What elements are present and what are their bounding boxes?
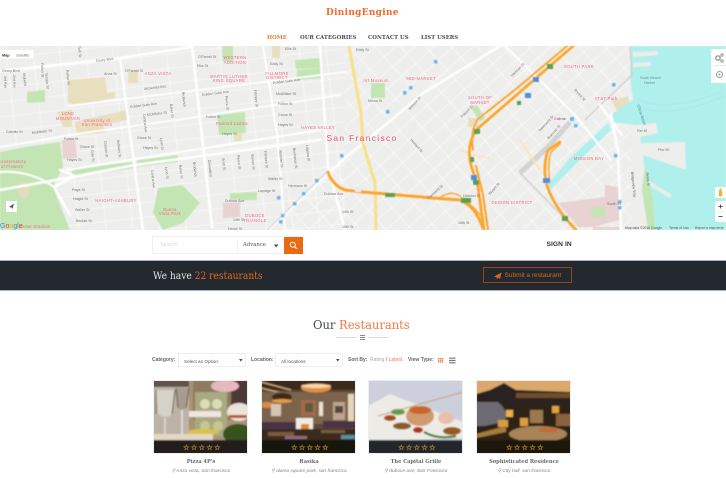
neighbourhood labels: WESTERN <box>223 55 247 60</box>
street labels: Geary Blvd <box>2 69 20 73</box>
photo: wine glasses and salad <box>154 381 247 453</box>
street labels: Eddy St <box>270 62 283 66</box>
neighbourhood labels: MID-MARKET <box>406 76 436 81</box>
street labels: 15th St <box>458 221 469 225</box>
highway shields <box>385 64 568 221</box>
card: Rasika <box>261 380 356 454</box>
filter bar: View Type: <box>408 357 434 363</box>
street labels: O'Farrell St <box>125 69 143 73</box>
street labels: Central Ave <box>150 170 156 189</box>
map type control: Satellite <box>16 53 30 57</box>
dark banner <box>0 260 726 291</box>
street labels: Divisadero <box>207 160 213 177</box>
street labels: Broderick <box>192 162 198 177</box>
street labels: Bryant St <box>573 88 586 102</box>
street labels: Folsom St <box>460 104 474 119</box>
map <box>0 46 726 230</box>
sign in: SIGN IN <box>546 240 572 248</box>
street labels: Anza St <box>104 72 117 76</box>
map type control: Map <box>2 53 10 57</box>
street labels: Division St <box>463 194 480 198</box>
main streets <box>0 46 632 230</box>
zoom control <box>715 201 726 222</box>
street labels: Hayes St <box>278 123 293 127</box>
location select <box>275 353 343 367</box>
neighbourhood labels: Kezar Stadium <box>19 224 51 229</box>
neighbourhood labels: Art Museum <box>363 78 389 83</box>
street labels: McAllister St <box>32 129 52 135</box>
category select <box>178 353 246 367</box>
street labels: Fulton St <box>64 137 78 141</box>
street labels: Duboce Ave <box>225 199 244 203</box>
street labels: Brannan St <box>546 124 561 140</box>
card title: Pizza 4P's: Pizza 4P's <box>187 458 215 464</box>
street labels: Bryant St <box>488 182 501 196</box>
navigation: LIST USERS <box>421 34 458 40</box>
highways <box>328 46 576 230</box>
neighbourhood labels: AT&T Park <box>595 96 618 101</box>
street labels: South Beach <box>640 76 661 80</box>
street labels: 2nd Ave <box>12 75 16 88</box>
neighbourhood labels: San Francisco <box>82 122 113 127</box>
street labels: China Basin <box>636 104 647 126</box>
card title: Sophisticated Residence: Sophisticated Residence <box>489 458 559 464</box>
filter bar: Location: <box>251 357 274 363</box>
street labels: Webster St <box>278 150 284 168</box>
street labels: Steiner St <box>250 154 256 170</box>
card location: alamo square park: ⚲ alamo square park, san francisco <box>271 469 347 474</box>
street labels <box>2 18 669 231</box>
street labels: Ashbury St <box>116 140 122 158</box>
street labels: Townsend St <box>426 184 444 201</box>
neighbourhood labels: FILLMORE <box>265 71 289 76</box>
neighbourhood labels: MARTIN LUTHER <box>210 74 248 79</box>
neighbourhood labels: HAYES VALLEY <box>301 125 335 130</box>
street labels: Fillmore St <box>263 151 269 168</box>
street labels: Baker St <box>169 104 174 118</box>
pegman <box>715 187 726 198</box>
star rating: ☆☆☆☆☆ <box>291 442 330 452</box>
neighbourhood labels: MOUNTAIN <box>56 116 80 121</box>
google logo: Google <box>0 223 23 230</box>
card: Pizza 4P's <box>153 380 248 454</box>
search bar: Search <box>160 242 177 248</box>
street labels: Haight St <box>73 197 88 201</box>
street labels: Ellis St <box>197 64 208 68</box>
search bar: Advance <box>243 242 266 248</box>
street labels: Bridgeview Way <box>630 172 637 198</box>
neighbourhood labels: DESIGN DISTRICT <box>491 200 533 205</box>
map: Report a map error <box>695 226 725 230</box>
title: DiningEngine <box>326 7 399 18</box>
street labels: Page St <box>72 188 85 192</box>
banner text: We have 22 restaurants <box>152 270 262 282</box>
street labels: Lyon St <box>164 167 169 179</box>
street labels: Howard St <box>409 138 423 153</box>
street labels: Waller St <box>268 177 282 181</box>
photo: restaurant interior <box>262 381 355 453</box>
street labels: Pier 48 <box>637 129 647 133</box>
street labels: Fillmore St <box>253 90 259 107</box>
submit button: Submit a restaurant <box>504 272 561 278</box>
location select: All locations <box>281 358 306 364</box>
photo: plated dish <box>369 381 462 453</box>
navigation: CONTACT US <box>368 34 409 40</box>
street labels: O'Farrell St <box>198 55 216 59</box>
filter bar: Sort By: <box>348 357 367 363</box>
street labels: Golden Gate Ave <box>202 90 229 97</box>
navigation: HOME <box>267 34 287 40</box>
street labels: Caltrain <box>554 117 566 121</box>
street labels: Grove St <box>80 145 94 149</box>
map type control <box>0 50 33 58</box>
neighbourhood labels: Painted Ladies <box>216 121 248 126</box>
neighbourhood labels: ADDITION <box>224 60 246 65</box>
card title: Rasika: Rasika <box>299 458 319 464</box>
star rating: ☆☆☆☆☆ <box>506 442 545 452</box>
street labels: McAllister St <box>276 92 296 96</box>
street labels: Minna St <box>368 99 382 103</box>
neighbourhood labels: HAIGHT-ASHBURY <box>95 198 137 203</box>
street labels: 3rd Ave <box>3 76 7 88</box>
category select: Select an Option <box>184 358 218 364</box>
street labels: Anzavista Ave <box>144 84 166 91</box>
star rating: ☆☆☆☆☆ <box>183 442 222 452</box>
street labels: 15th St <box>342 225 353 229</box>
neighbourhood labels: DISTRICT <box>266 75 288 80</box>
street labels: Broderick <box>181 92 187 107</box>
yellow road <box>349 46 376 230</box>
street labels: Golden Gate Ave <box>273 78 300 85</box>
street labels: Eddy St <box>356 48 369 52</box>
street labels: Scott St <box>221 158 226 171</box>
street labels: Grove St <box>137 136 151 140</box>
filter bar: Category: <box>152 357 175 363</box>
street labels: Turk St <box>77 46 82 57</box>
card title: The Capital Grille: The Capital Grille <box>391 458 441 464</box>
street labels: Illinois St <box>645 172 650 186</box>
street labels: Lyon St <box>159 138 164 150</box>
street labels: Pierce St <box>236 155 242 170</box>
street labels: Fulton St <box>206 115 220 119</box>
neighbourhood labels: University of <box>84 118 111 123</box>
filter bar <box>152 353 456 367</box>
city label: San Francisco <box>326 133 398 143</box>
search bar <box>152 236 303 254</box>
map attribution: Map data ©2016 Google <box>625 226 662 230</box>
street labels: Townsend St <box>538 115 555 133</box>
street labels: Hayes St <box>67 158 82 162</box>
neighbourhood labels: TRIANGLE <box>243 218 267 223</box>
photo: evening terrace <box>477 381 570 453</box>
neighbourhood labels <box>0 55 618 229</box>
neighbourhood labels: Buena <box>163 207 177 212</box>
filter bar: Rating / Latest <box>370 357 402 363</box>
card: Sophisticated Residence <box>476 380 571 454</box>
street labels: Pierce St <box>224 96 230 111</box>
neighbourhood labels: of Flowers <box>1 164 23 169</box>
street labels: Mission St <box>408 96 422 111</box>
neighbourhood labels: Vista Park <box>159 211 182 216</box>
card location: duboce ave: ⚲ duboce ave, San Francisco <box>384 469 447 474</box>
card location: Anza vista: ⚲ Anza vista, San francisco <box>172 469 230 474</box>
neighbourhood labels: ANZA VISTA <box>145 71 171 76</box>
neighbourhood labels: SOUTH OF <box>468 95 492 100</box>
street labels: Lapidge St <box>258 189 275 193</box>
street labels: Hermann St <box>288 184 307 188</box>
street labels: Golden Gate Ave <box>130 102 157 109</box>
view type icons <box>438 358 456 364</box>
neighbourhood labels: DUBOCE <box>245 213 265 218</box>
neighbourhood labels: LONE <box>62 111 74 116</box>
heading divider <box>336 335 388 340</box>
neighbourhood labels: MARKET <box>470 100 490 105</box>
street labels: Harrison St <box>510 62 525 78</box>
card: The Capital Grille <box>368 380 463 454</box>
star rating: ☆☆☆☆☆ <box>398 442 437 452</box>
locate button <box>6 201 17 212</box>
submit button <box>483 267 572 283</box>
street labels: Temple St <box>44 73 50 89</box>
transit stops <box>277 60 622 224</box>
street labels: Central Ave <box>142 114 148 133</box>
street labels: Fulton St <box>40 63 45 77</box>
street labels: South St <box>607 202 621 206</box>
street labels: Parker St <box>65 70 71 85</box>
card location: City hall: ⚲ City hall, san francisco <box>498 469 550 474</box>
street labels: Laguna St <box>305 145 311 161</box>
neighbourhood labels: KING SQUARE <box>213 78 245 83</box>
caltrain tracks <box>520 122 570 173</box>
street labels: Pier 50 <box>658 148 669 152</box>
search button <box>284 237 303 254</box>
map tools control <box>711 49 726 83</box>
street labels: Hayes St <box>222 132 237 136</box>
street labels: Cabrillo St <box>6 130 23 134</box>
street labels: Harbor <box>644 81 656 85</box>
section heading: Our Restaurants <box>313 317 410 332</box>
navigation <box>267 34 458 40</box>
street labels: Clayton St <box>103 141 109 158</box>
street labels: Cole St <box>90 150 95 162</box>
street labels: Waller St <box>75 208 89 212</box>
street labels: Hayes St <box>143 146 158 150</box>
street labels: McAllister St <box>147 111 167 117</box>
water <box>611 46 726 230</box>
street labels: Arguello <box>22 73 27 86</box>
street labels: Grove St <box>278 113 292 117</box>
street labels: Fulton St <box>278 102 292 106</box>
map: Terms of Use <box>669 226 689 230</box>
navigation: OUR CATEGORIES <box>300 34 356 40</box>
street labels: Buchanan St <box>292 148 298 169</box>
neighbourhood labels: SOUTH PARK <box>564 64 594 69</box>
street labels: Duboce Ave <box>324 192 343 196</box>
street labels: Ellis St <box>285 47 296 51</box>
neighbourhood labels: MISSION BAY <box>574 156 604 161</box>
street labels: Beulah St <box>76 219 92 223</box>
street labels: 14th St <box>342 210 353 214</box>
street labels: 14th St <box>233 218 244 222</box>
street labels: Baker St <box>178 165 183 179</box>
street labels: Geary Blvd <box>96 57 114 63</box>
